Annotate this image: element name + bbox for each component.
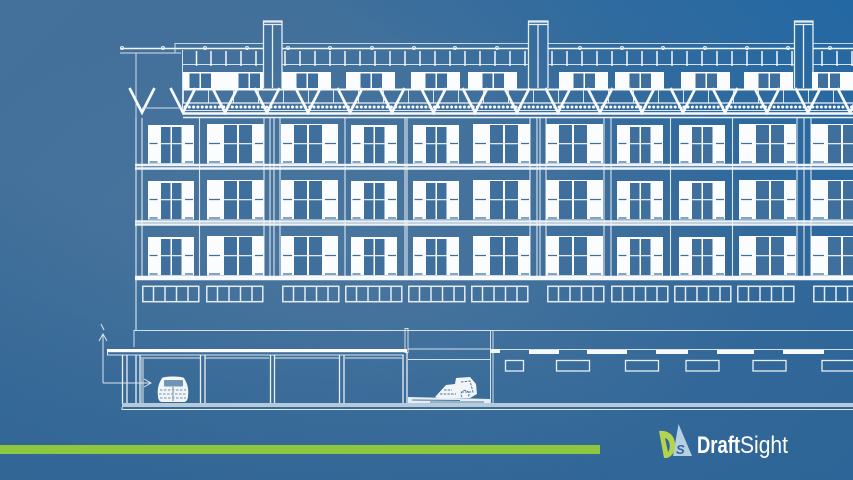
- window row 1: [148, 124, 853, 164]
- window row 2: [148, 180, 853, 220]
- logo wordmark: DraftSight: [697, 432, 788, 459]
- building elevation drawing: [107, 21, 853, 410]
- chimneys: [263, 21, 814, 88]
- basement windows: [143, 286, 853, 302]
- icon: skid loader on ramp: [408, 377, 490, 403]
- ground level structure: [107, 328, 853, 410]
- dimension arrow: [99, 324, 151, 387]
- window row 3: [148, 236, 853, 276]
- floor band 3: [135, 276, 853, 280]
- floor band 2: [135, 222, 853, 224]
- wall dividers: [136, 118, 811, 330]
- dormer windows: [183, 72, 853, 89]
- icon: car: [158, 376, 188, 402]
- ceiling beams and wall openings: [506, 350, 853, 371]
- roof structure: [120, 43, 853, 118]
- logo icon: S: [676, 442, 685, 457]
- floor band 1: [135, 165, 853, 168]
- green accent bar: [0, 445, 600, 454]
- truss band: [130, 88, 853, 118]
- logo: DraftSight: [659, 424, 788, 459]
